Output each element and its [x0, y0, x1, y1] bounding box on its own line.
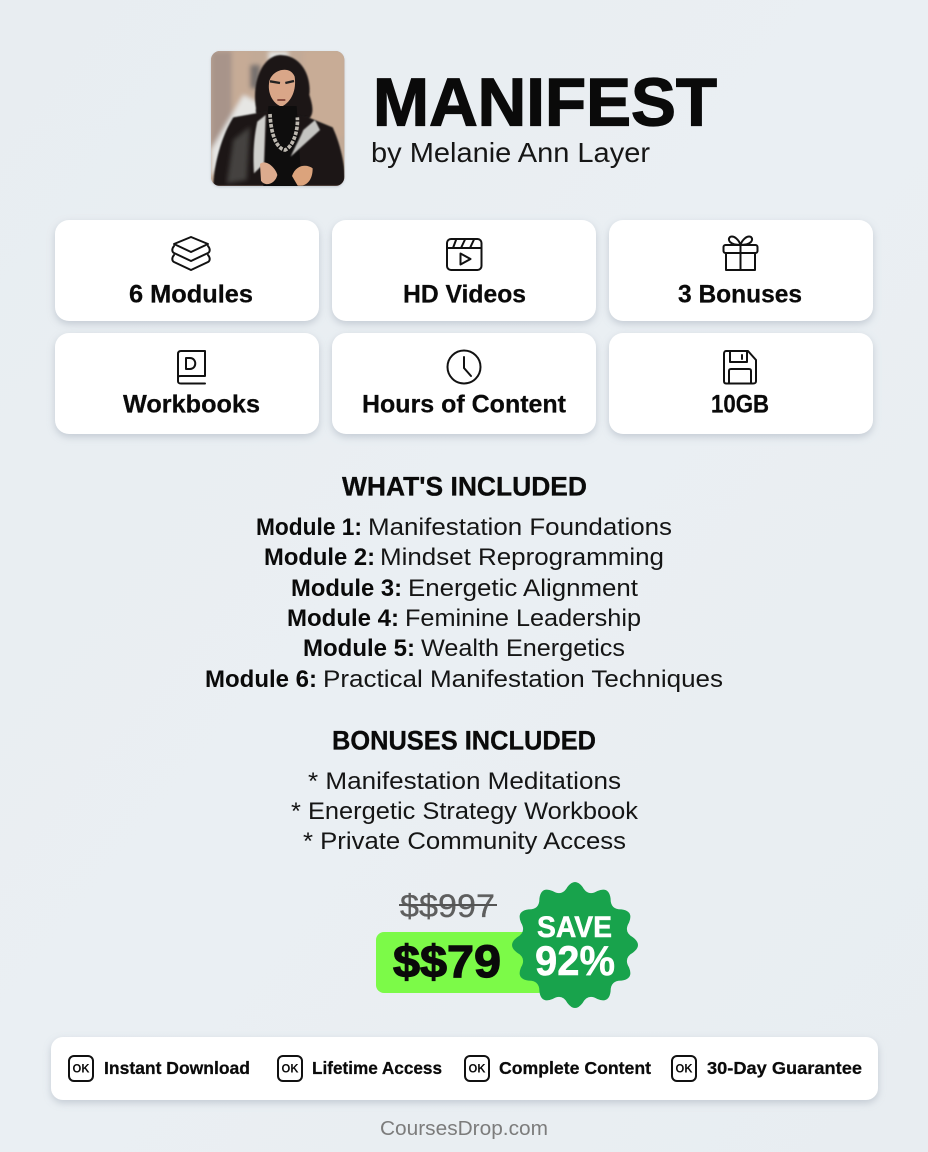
item: Instant Download [69, 1056, 250, 1081]
item: Instant Download: OK [72, 1064, 90, 1076]
title: MANIFEST [373, 64, 717, 140]
card: Workbooks: Workbooks [123, 390, 260, 418]
icon: video clapper [447, 239, 482, 270]
module list: Module 1: [256, 514, 362, 541]
item: Complete Content: Complete Content [499, 1058, 651, 1078]
icon: gift box [724, 237, 758, 270]
bonus list: * Manifestation Meditations [308, 768, 621, 795]
item: Lifetime Access [278, 1056, 442, 1081]
icon: floppy disk [724, 351, 756, 384]
savings badge [512, 882, 638, 1008]
card: 3 Bonuses [609, 220, 873, 321]
savings badge: 92% [535, 937, 615, 984]
footer source: CoursesDrop.com [380, 1117, 548, 1140]
item: Complete Content [465, 1056, 651, 1081]
portrait photo of Melanie Ann Layer [211, 51, 345, 186]
module list: Module 3: [291, 575, 402, 602]
bonus list: * Energetic Strategy Workbook [291, 798, 639, 825]
heading: bonuses included: BONUSES INCLUDED [332, 726, 596, 756]
item: 30-Day Guarantee [672, 1056, 862, 1081]
icon: workbook [178, 351, 205, 384]
module list: Module 2: [264, 544, 375, 571]
author subtitle: by Melanie Ann Layer [371, 137, 650, 168]
module list [205, 514, 723, 693]
card: HD Videos [332, 220, 596, 321]
module list: Wealth Energetics [421, 635, 625, 662]
card: 10GB [609, 333, 873, 434]
item: Lifetime Access: OK [282, 1064, 299, 1076]
module list: Mindset Reprogramming [380, 544, 664, 571]
original price struck through: $$997 [400, 888, 495, 924]
card: 6 Modules [55, 220, 319, 321]
item: Lifetime Access: Lifetime Access [312, 1058, 442, 1078]
item: Complete Content: OK [468, 1064, 486, 1076]
item: 30-Day Guarantee: OK [676, 1064, 693, 1076]
card: Workbooks [55, 333, 319, 434]
module list: Module 6: [205, 666, 317, 693]
card: 6 Modules: 6 Modules [129, 280, 253, 308]
heading: what's included: WHAT'S INCLUDED [342, 472, 587, 502]
icon: stacked books [172, 237, 210, 270]
card: Hours of Content [332, 333, 596, 434]
module list: Practical Manifestation Techniques [323, 666, 723, 693]
module list: Module 5: [303, 635, 415, 662]
card: Hours of Content: Hours of Content [362, 390, 567, 418]
module list: Energetic Alignment [408, 575, 638, 602]
card: 3 Bonuses: 3 Bonuses [678, 280, 802, 308]
bonus list: * Private Community Access [303, 828, 626, 855]
guarantee bar [51, 1037, 878, 1100]
item: Instant Download: Instant Download [104, 1058, 250, 1078]
card: 10GB: 10GB [711, 390, 769, 418]
item: 30-Day Guarantee: 30-Day Guarantee [707, 1058, 862, 1078]
module list: Module 4: [287, 605, 399, 632]
sale price bar: $$79 [393, 936, 501, 987]
icon: clock [448, 350, 480, 384]
card: HD Videos: HD Videos [403, 280, 526, 308]
sale price bar [376, 932, 546, 993]
savings badge: SAVE [537, 911, 612, 944]
bonus list [291, 768, 639, 855]
module list: Manifestation Foundations [368, 514, 672, 541]
module list: Feminine Leadership [405, 605, 641, 632]
